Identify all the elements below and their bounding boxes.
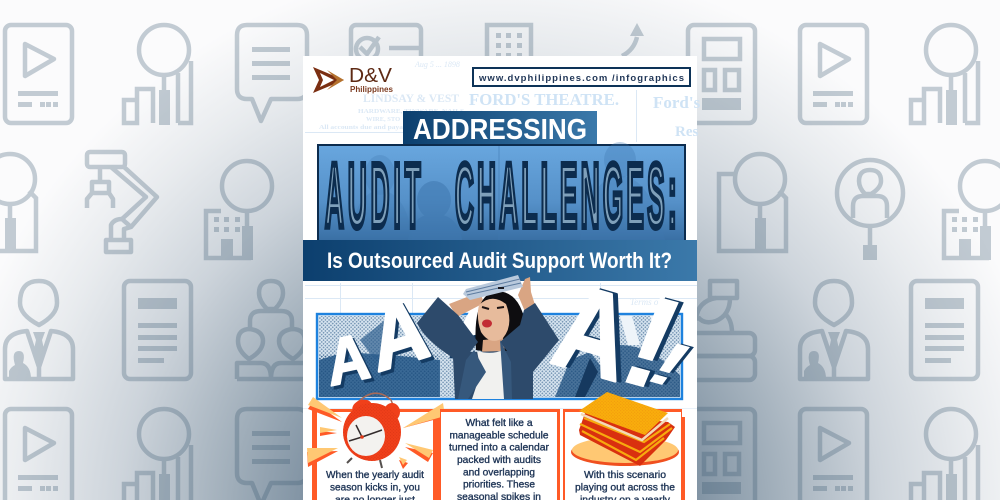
faint ledger background: LINDSAY & VEST [363, 93, 459, 105]
logo: Philippines [350, 85, 394, 94]
silhouettes of people behind the title [350, 142, 665, 240]
body text [326, 470, 424, 500]
faint ledger background: HARDWARE, TINWARE, NAILS [358, 108, 464, 115]
panel: card 2 [440, 409, 560, 500]
subtitle band [303, 240, 697, 281]
panel: card 1 [307, 393, 445, 500]
website url box: www.dvphilippines.com /infographics [478, 73, 684, 84]
hair [475, 291, 527, 352]
body text [575, 470, 675, 500]
hero: halftone office scene [317, 314, 682, 399]
lapels [458, 340, 512, 399]
white shirt [472, 350, 507, 399]
letter A 2: A [363, 276, 436, 391]
burst rays [307, 397, 445, 469]
exclamation mark 1: ! [602, 268, 702, 417]
icon row 3 [5, 281, 978, 380]
body text [449, 418, 550, 500]
body text: manageable schedule [450, 430, 549, 442]
blazer [417, 297, 559, 399]
folder stack [579, 392, 675, 466]
mouth [482, 320, 492, 328]
exclamation mark 2: ! [636, 330, 711, 399]
woman holding paper stack [417, 275, 559, 399]
body text: and overlapping [463, 468, 535, 478]
body text: turned into a calendar [449, 442, 550, 454]
faint ledger background [303, 60, 701, 409]
letter A 4: A [547, 256, 650, 407]
faint ledger background: FORD'S THEATRE. [469, 90, 619, 109]
letter A 3: A [442, 263, 527, 373]
face and neck [482, 338, 505, 352]
hero scream lettering [323, 256, 711, 417]
subtitle band: Is Outsourced Audit Support Worth It? [327, 248, 672, 273]
faint ledger background: Ford's [653, 93, 701, 112]
faint ledger background: Res [675, 124, 698, 140]
letter A 2: A [366, 279, 439, 394]
faint ledger background: Aug 5 ... 1898 [414, 60, 460, 69]
raised forearms [449, 277, 535, 317]
paper stack [463, 275, 523, 300]
panel: infographic poster [303, 56, 711, 500]
heading: Audit Challenges: CHALLENGES: [455, 146, 680, 247]
faint ledger background: All accounts due and paya [319, 125, 403, 131]
website url box [473, 68, 690, 86]
icon row 1 [5, 23, 978, 125]
eyes [482, 307, 504, 309]
faint ledger background: Terms of trust [630, 297, 680, 307]
plate under folders [571, 438, 679, 466]
letter A 3: A [445, 266, 530, 376]
panel: card 3 [563, 392, 685, 500]
exclamation mark 1: ! [607, 268, 707, 417]
icon row 4 [5, 409, 978, 500]
letter A 1: A [326, 323, 377, 403]
letter A 4: A [542, 256, 645, 407]
letter A 1: A [323, 320, 374, 400]
faint ledger background: WIRE, STO [366, 116, 400, 123]
body text: With this scenario [584, 470, 666, 481]
exclamation mark 2: ! [632, 330, 707, 399]
body text: playing out across the [575, 482, 675, 494]
logo [313, 65, 394, 94]
alarm clock [343, 393, 401, 468]
body text: packed with audits [457, 455, 541, 466]
body text: What felt like a [466, 418, 533, 429]
heading: Addressing: ADDRESSING [413, 114, 587, 146]
logo: D&V [349, 65, 393, 87]
icon row 2 [0, 152, 1000, 260]
heading: Audit Challenges: AUDIT [325, 146, 425, 247]
body text: priorities. These [463, 480, 535, 490]
heading: Audit Challenges [317, 142, 686, 247]
body text: season kicks in, you [330, 482, 420, 494]
body text: When the yearly audit [326, 470, 424, 481]
